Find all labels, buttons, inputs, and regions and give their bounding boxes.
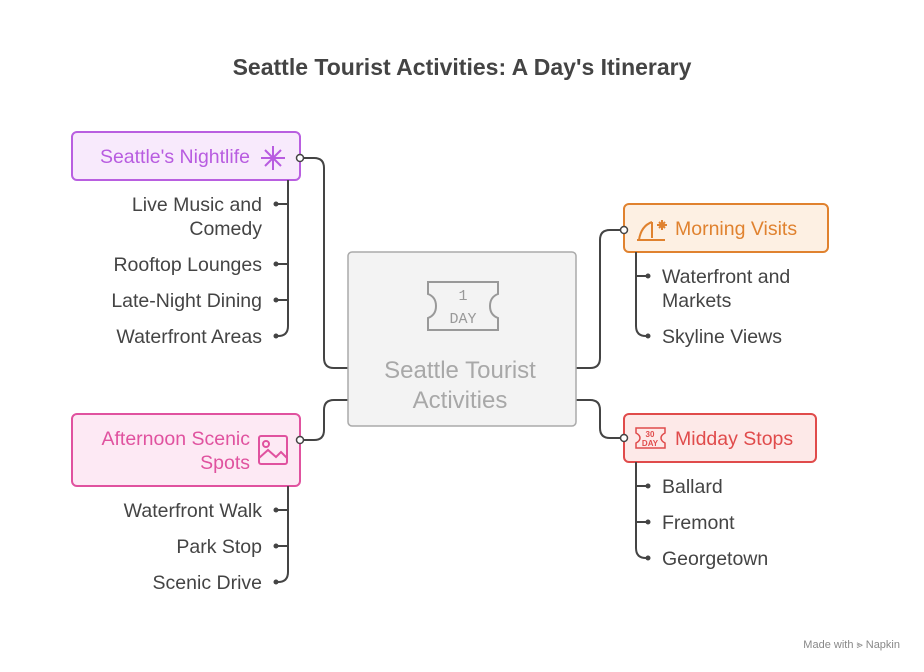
center box: Activities: [413, 387, 507, 414]
panel: nightlife: Live Music and: [132, 194, 262, 216]
panel: morning: Waterfront and: [662, 266, 790, 288]
panel: nightlife: Waterfront Areas: [116, 326, 262, 348]
center box: Seattle Tourist: [384, 357, 536, 384]
panel: afternoon: Spots: [200, 452, 250, 474]
panel: morning: Markets: [662, 290, 732, 312]
footer credit: Made with ⪢ Napkin: [803, 639, 900, 651]
panel: nightlife: Comedy: [189, 218, 262, 240]
panel: morning: Skyline Views: [662, 326, 782, 348]
panel: midday: Georgetown: [662, 548, 768, 570]
panel: nightlife: [72, 132, 304, 348]
panel: midday: [620, 414, 816, 570]
connectors from center: [300, 158, 624, 440]
icon: picture: [259, 436, 287, 464]
panel: afternoon: Afternoon Scenic: [101, 428, 250, 450]
panel: morning: [620, 204, 828, 348]
panel: nightlife: Late-Night Dining: [111, 290, 262, 312]
panel: morning: Morning Visits: [675, 218, 797, 240]
center box: [348, 252, 576, 426]
panel: midday: 30: [646, 430, 655, 439]
icon: sunrise: [637, 220, 667, 240]
icon: ticket 1 day: [428, 282, 498, 330]
panel: midday: Fremont: [662, 512, 735, 534]
panel: afternoon: [72, 414, 304, 594]
panel: afternoon: Waterfront Walk: [124, 500, 262, 522]
title: Seattle Tourist Activities: A Day's Itinerary: [233, 54, 692, 80]
panel: afternoon: Park Stop: [176, 536, 262, 558]
panel: afternoon: Scenic Drive: [153, 572, 262, 594]
panel: nightlife: Rooftop Lounges: [113, 254, 262, 276]
icon: ticket 1 day: DAY: [449, 311, 477, 328]
icon: ticket 1 day: 1: [458, 288, 468, 305]
icon: 30 day ticket: [636, 428, 665, 448]
panel: midday: Ballard: [662, 476, 723, 498]
icon: fireworks: [261, 146, 285, 170]
panel: nightlife: Seattle's Nightlife: [100, 146, 250, 168]
panel: midday: DAY: [642, 439, 659, 448]
panel: midday: Midday Stops: [675, 428, 793, 450]
